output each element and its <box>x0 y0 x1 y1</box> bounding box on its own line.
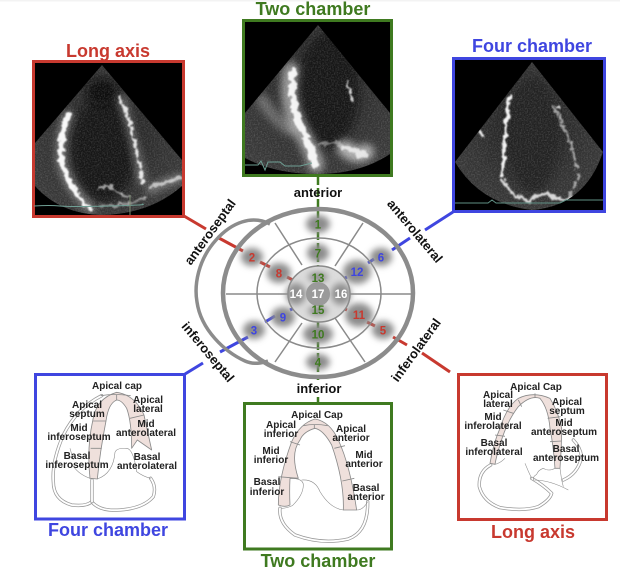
white apical numbers: 14 <box>290 289 303 301</box>
wall label: inferoseptal: inferoseptal <box>179 319 237 385</box>
four chamber labels: Basal <box>134 452 161 463</box>
long axis labels: anteroseptum <box>531 427 597 438</box>
two chamber labels: Apical <box>266 420 296 431</box>
four chamber labels <box>45 381 177 472</box>
two chamber labels: anterior <box>332 433 370 444</box>
wall label text: inferior: inferior <box>297 381 341 396</box>
two chamber labels: Apical Cap <box>291 410 343 421</box>
four chamber labels: lateral <box>133 404 163 415</box>
right ventricle outline <box>196 220 270 363</box>
connector: two chamber line <box>317 177 319 402</box>
two chamber labels: Apical <box>336 424 366 435</box>
long axis labels: Apical Cap <box>510 382 562 393</box>
two chamber labels: inferior <box>254 455 288 466</box>
panel: two chamber echo image <box>243 20 393 176</box>
four chamber labels: Apical cap <box>92 381 142 392</box>
four chamber labels: septum <box>69 409 105 420</box>
connector: inferolateral red line <box>328 302 450 372</box>
long axis labels: anteroseptum <box>533 453 599 464</box>
four chamber labels: Mid <box>70 423 88 434</box>
long axis labels: lateral <box>483 399 513 410</box>
red segment numbers: 8 <box>276 268 283 280</box>
red segment numbers: 11 <box>353 310 366 322</box>
green segment numbers: 10 <box>312 330 324 342</box>
long axis labels: Apical <box>483 390 513 401</box>
panel: long axis diagram <box>458 374 606 520</box>
connector: four chamber line <box>327 212 453 287</box>
four chamber labels: anterolateral <box>117 461 177 472</box>
wall label: anteroseptal: anteroseptal <box>181 196 239 268</box>
two chamber labels: inferior <box>264 429 298 440</box>
green segment numbers: 15 <box>312 305 325 317</box>
wall label: anterolateral: anterolateral <box>384 196 446 266</box>
long axis labels: inferolateral <box>464 421 522 432</box>
four chamber labels: inferoseptum <box>45 460 109 471</box>
apical ring <box>288 266 350 322</box>
blurred segment shadows <box>241 215 394 370</box>
blue segment numbers <box>251 252 384 338</box>
long axis heart drawing <box>479 393 582 509</box>
bullseye plot: 17 segments <box>196 209 413 377</box>
green segment numbers <box>312 220 325 370</box>
wall label background: inferior <box>290 380 346 397</box>
blue segment numbers: 3 <box>251 326 257 338</box>
red segment numbers: 2 <box>249 252 255 264</box>
green segment numbers: 7 <box>315 248 321 260</box>
white apical numbers: 17 <box>312 289 324 301</box>
apex circle <box>306 282 330 306</box>
two chamber labels: Basal <box>353 483 380 494</box>
two chamber labels: Mid <box>355 450 373 461</box>
four chamber labels: inferoseptum <box>47 432 111 443</box>
connector: long axis line <box>184 216 308 288</box>
panel: long axis echo image <box>33 62 184 217</box>
two chamber labels: Basal <box>254 477 281 488</box>
long axis labels: Basal <box>481 438 508 449</box>
two chamber labels: Mid <box>262 446 280 457</box>
heading: long axis bottom: Long axis <box>491 522 575 542</box>
four chamber labels: Mid <box>137 419 155 430</box>
heading: four chamber top: Four chamber <box>472 36 592 56</box>
long axis labels: Apical <box>552 397 582 408</box>
heading: two chamber bottom: Two chamber <box>261 551 375 571</box>
mid ring <box>257 238 381 348</box>
green segment numbers: 13 <box>312 273 324 285</box>
four chamber labels: Basal <box>64 451 91 462</box>
four chamber heart drawing <box>53 392 155 510</box>
two chamber labels: anterior <box>345 459 383 470</box>
segment spokes <box>226 223 411 362</box>
blue segment numbers: 12 <box>351 267 363 279</box>
panel: two chamber diagram <box>244 404 392 549</box>
two chamber labels: inferior <box>250 487 284 498</box>
four chamber labels: anterolateral <box>116 428 176 439</box>
long axis labels: Mid <box>555 418 573 429</box>
panel: four chamber diagram <box>36 374 184 519</box>
green segment numbers: 4 <box>315 358 322 370</box>
long axis labels: septum <box>549 406 585 417</box>
long axis labels <box>464 382 599 464</box>
four chamber labels: Apical <box>133 395 163 406</box>
long axis labels: Mid <box>484 412 502 423</box>
two chamber heart drawing <box>278 419 368 541</box>
red segment numbers: 5 <box>380 326 387 338</box>
wall label: anterior: anterior <box>294 185 342 200</box>
wall label: inferolateral: inferolateral <box>388 315 444 385</box>
apical shadows <box>286 272 351 316</box>
red segment numbers <box>249 252 387 338</box>
panel: four chamber echo image <box>454 58 604 212</box>
blue segment numbers: 9 <box>280 312 286 324</box>
green segment numbers: 1 <box>315 220 322 232</box>
long axis labels: inferolateral <box>465 447 523 458</box>
heading: long axis top: Long axis <box>66 41 150 61</box>
heading: four chamber bottom: Four chamber <box>48 520 168 540</box>
outer ring <box>223 209 413 377</box>
long axis labels: Basal <box>553 444 580 455</box>
connector: inferoseptal blue line <box>185 302 308 374</box>
blue segment numbers: 6 <box>378 252 384 264</box>
white apical numbers <box>290 289 347 301</box>
four chamber labels: Apical <box>72 400 102 411</box>
two chamber labels <box>250 410 385 503</box>
white apical numbers: 16 <box>335 289 347 301</box>
two chamber labels: anterior <box>347 492 385 503</box>
